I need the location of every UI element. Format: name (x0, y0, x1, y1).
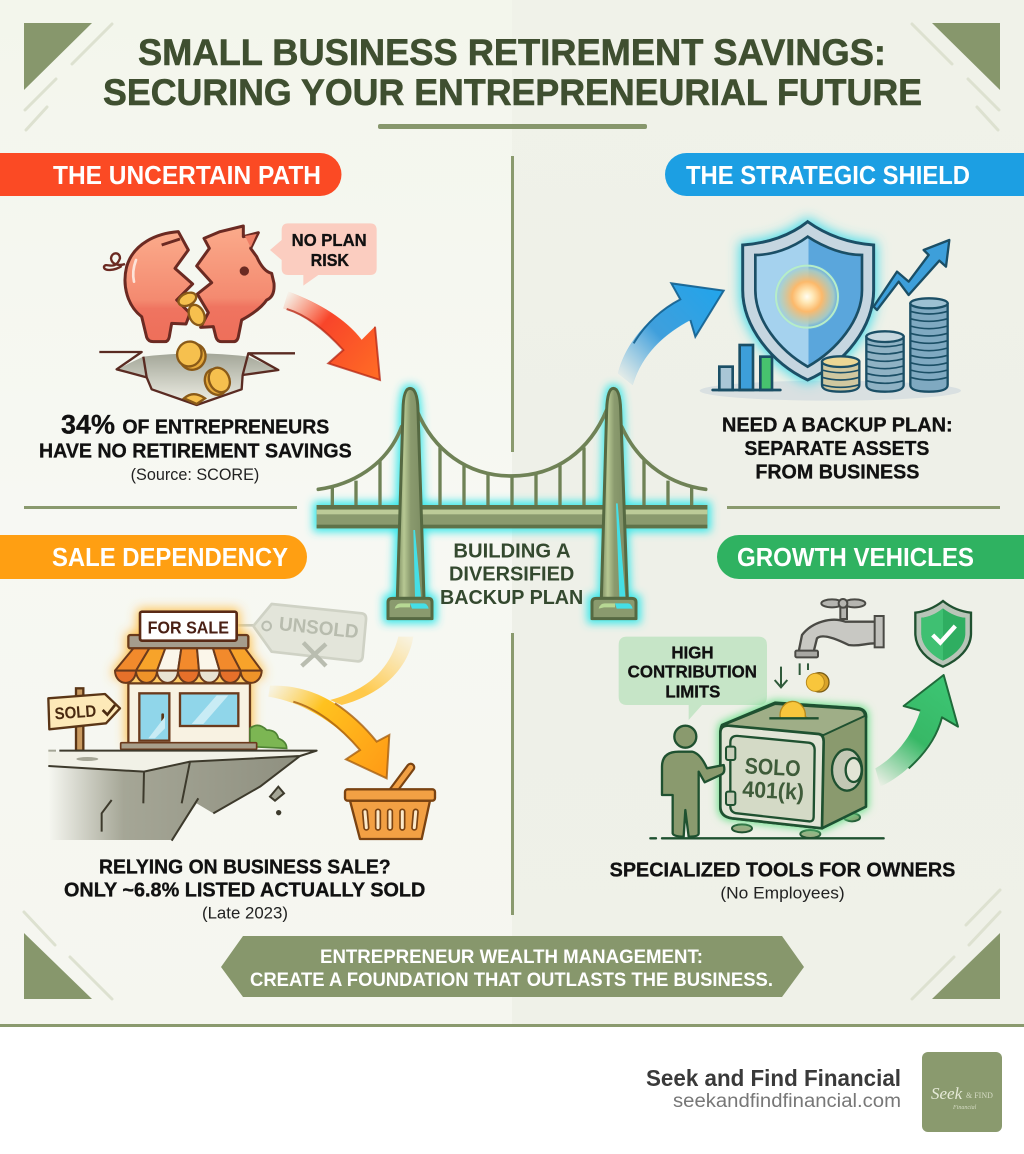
panel: the uncertain path (0, 153, 380, 484)
callout: no plan risk: NO PLAN (292, 230, 367, 250)
callout: no plan risk: RISK (311, 250, 349, 270)
stat text: 34 percent: 34% (61, 409, 115, 439)
heading pill: the strategic shield (665, 153, 1024, 196)
footer logo (922, 1052, 1002, 1132)
text: need a backup plan: SEPARATE ASSETS (744, 438, 929, 460)
stat text: 34 percent: (Source: SCORE) (131, 465, 259, 484)
panel: sale dependency (0, 535, 435, 922)
heading pill: growth vehicles (717, 535, 1024, 579)
text: need a backup plan: FROM BUSINESS (755, 461, 919, 483)
icon: faucet and coins (795, 599, 884, 692)
icon: cliff edge (48, 751, 317, 841)
callout: high contribution limits (619, 637, 787, 720)
text: relying on business sale: ONLY ~6.8% LISTED ACTUALLY SOLD (64, 880, 425, 902)
stat text: 34 percent (39, 409, 352, 484)
label: building a diversified backup plan: DIVERSIFIED (449, 564, 574, 586)
heading pill: sale dependency (0, 535, 307, 579)
icon: solo 401(k) safe: 401(k) (742, 776, 805, 805)
text: specialized tools: SPECIALIZED TOOLS FOR OWNERS (610, 860, 955, 882)
footer logo: & FIND (966, 1091, 993, 1100)
arrow: red down to bridge (283, 292, 380, 380)
dividers (24, 156, 1000, 915)
text: specialized tools (610, 860, 955, 902)
panel: the strategic shield (618, 153, 1024, 483)
callout: high contribution limits: LIMITS (665, 681, 720, 701)
bottom banner: CREATE A FOUNDATION THAT OUTLASTS THE BUSINESS. (250, 970, 773, 991)
icon: storefront for sale: FOR SALE (148, 617, 229, 637)
text: relying on business sale: RELYING ON BUSINESS SALE? (99, 856, 391, 878)
icon: broken piggy bank and hole (99, 226, 295, 405)
icon: storefront for sale (115, 612, 287, 749)
callout: high contribution limits: HIGH (671, 642, 714, 662)
heading pill: growth vehicles: GROWTH VEHICLES (737, 542, 974, 572)
text: relying on business sale: (Late 2023) (202, 903, 288, 922)
arrow: yellow swoosh to basket (268, 637, 413, 778)
label: building a diversified backup plan: BACKUP PLAN (440, 587, 583, 609)
footer brand text: seekandfindfinancial.com (673, 1091, 901, 1112)
icon: solo 401(k) safe: SOLO (744, 752, 801, 781)
bottom banner: ENTREPRENEUR WEALTH MANAGEMENT: (320, 947, 703, 968)
icon: green check shield (915, 601, 971, 667)
footer logo: Seek (931, 1084, 963, 1103)
icon: basket (345, 767, 435, 839)
icon: solo 401(k) safe (650, 701, 884, 838)
heading pill: sale dependency: SALE DEPENDENCY (52, 542, 288, 572)
text: relying on business sale (64, 856, 425, 922)
text: need a backup plan (722, 415, 953, 483)
footer brand text: Seek and Find Financial (646, 1065, 901, 1091)
callout: no plan risk (270, 223, 377, 286)
heading pill: the uncertain path: THE UNCERTAIN PATH (53, 160, 321, 190)
label: building a diversified backup plan: BUILDING A (453, 540, 571, 562)
title (103, 32, 922, 129)
icon: sold sign (48, 688, 120, 751)
title: SECURING YOUR ENTREPRENEURIAL FUTURE (103, 72, 922, 113)
bottom banner (221, 936, 804, 997)
heading pill: the uncertain path (0, 153, 341, 196)
callout: high contribution limits: CONTRIBUTION (628, 662, 757, 682)
arrow: green up to shield (875, 675, 958, 787)
icon: sold sign: SOLD (54, 701, 97, 723)
bridge (317, 388, 707, 620)
panel: growth vehicles (610, 535, 1024, 902)
icon: unsold tag: UNSOLD (278, 614, 360, 643)
title: SMALL BUSINESS RETIREMENT SAVINGS: (138, 32, 886, 73)
icon: unsold tag (238, 604, 366, 666)
icon: person (662, 726, 724, 837)
footer brand text (646, 1065, 901, 1112)
text: specialized tools: (No Employees) (720, 883, 845, 902)
icon: shield with coin stacks and chart (700, 222, 961, 401)
label: building a diversified backup plan (440, 540, 583, 609)
text: need a backup plan: NEED A BACKUP PLAN: (722, 415, 953, 437)
heading pill: the strategic shield: THE STRATEGIC SHIELD (686, 160, 970, 190)
footer logo: Financial (952, 1105, 977, 1111)
arrow: blue up to shield (618, 283, 724, 385)
stat text: 34 percent: HAVE NO RETIREMENT SAVINGS (39, 440, 352, 463)
stat text: 34 percent: OF ENTREPRENEURS (122, 415, 329, 438)
